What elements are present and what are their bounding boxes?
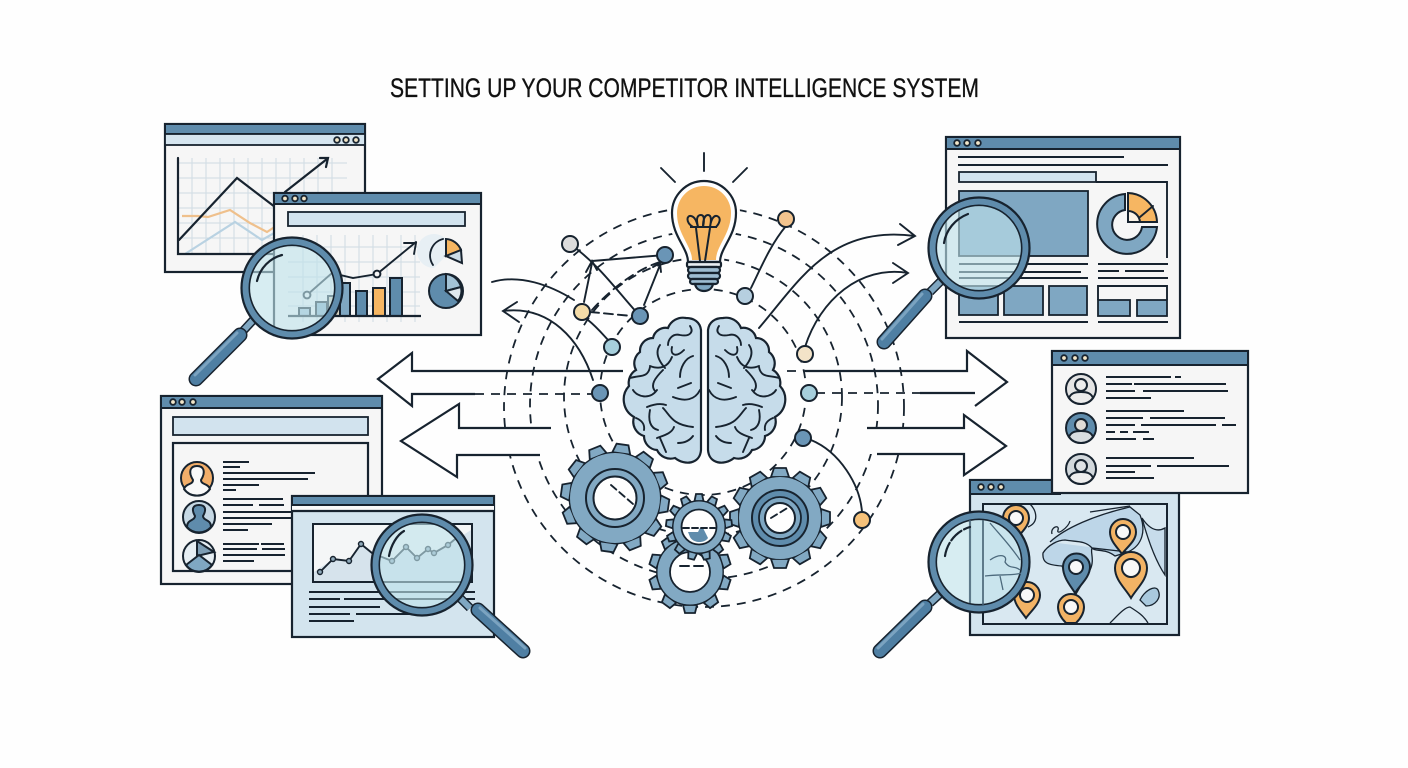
title: SETTING UP YOUR COMPETITOR INTELLIGENCE SYSTEM bbox=[390, 73, 979, 103]
avatar: orange bbox=[181, 462, 213, 496]
icon: gear small centre bbox=[666, 494, 732, 560]
panel: world map window (bottom right) bbox=[970, 480, 1179, 635]
avatar: pie bbox=[183, 540, 215, 572]
window header bbox=[274, 193, 481, 204]
avatar: grey one bbox=[1066, 374, 1096, 404]
search bar bbox=[173, 417, 368, 435]
inner frame bbox=[173, 443, 368, 571]
arrow: left upper outgoing bbox=[378, 353, 623, 406]
brain right hemisphere bbox=[708, 318, 785, 463]
dashed orbit rings bbox=[495, 207, 915, 607]
window header bbox=[161, 396, 382, 408]
window header bbox=[165, 124, 365, 145]
panel: competitor profiles window (left) bbox=[161, 396, 382, 584]
arrow: left lower outgoing bbox=[401, 404, 551, 477]
text lines bbox=[959, 264, 1168, 322]
panel: web analytics window (top right) bbox=[946, 137, 1180, 338]
magnifier: top right bbox=[882, 198, 1030, 342]
search bar bbox=[959, 172, 1096, 182]
brain left hemisphere bbox=[624, 318, 701, 463]
panel: line chart window (back, top left) bbox=[165, 124, 365, 272]
map pins bbox=[1003, 505, 1147, 623]
search bar bbox=[288, 212, 465, 226]
pie chart top bbox=[417, 234, 462, 268]
arrow: right upper outgoing bbox=[787, 351, 1007, 406]
window header bbox=[292, 496, 494, 511]
main image block bbox=[959, 191, 1088, 256]
orange and blue data lines bbox=[182, 210, 276, 254]
magnifier: top left bbox=[195, 238, 342, 379]
black trend arrow bbox=[178, 158, 328, 254]
icon: gear large left bbox=[560, 443, 670, 553]
chart grid bbox=[288, 235, 420, 322]
panel: dashboard window (front, top left) bbox=[274, 193, 481, 335]
window header bbox=[1052, 351, 1248, 365]
avatar: grey two bbox=[1066, 454, 1096, 484]
avatar: blue bbox=[183, 501, 215, 533]
curved arrows and network links bbox=[492, 224, 915, 512]
avatar: blue bbox=[1066, 413, 1096, 443]
map landmasses bbox=[1028, 504, 1165, 623]
pie chart bottom bbox=[429, 274, 463, 308]
arrow: right lower outgoing bbox=[867, 415, 1006, 475]
text lines bbox=[309, 592, 475, 621]
thumbnail blocks bbox=[959, 286, 1167, 316]
donut chart bbox=[1097, 193, 1157, 254]
icon: light bulb bbox=[661, 153, 747, 291]
magnifier: bottom left bbox=[372, 514, 525, 651]
icon: gear large right bbox=[730, 468, 830, 568]
bar chart bbox=[288, 278, 421, 316]
magnifier: bottom right bbox=[878, 512, 1030, 651]
chart grid bbox=[179, 158, 347, 254]
window header bbox=[946, 137, 1180, 149]
text lines bbox=[1106, 377, 1236, 478]
trend arrow bbox=[304, 242, 416, 298]
panel: trend report window (front, bottom left) bbox=[292, 496, 494, 637]
map frame bbox=[983, 504, 1167, 624]
window header bbox=[970, 480, 1060, 494]
text lines bbox=[223, 462, 315, 561]
network nodes bbox=[562, 211, 870, 528]
header text lines bbox=[958, 157, 1168, 165]
icon: brain bbox=[624, 318, 785, 463]
icon: gear bottom bbox=[649, 531, 731, 613]
line chart bbox=[313, 524, 472, 582]
panel: people directory window (right) bbox=[1052, 351, 1248, 493]
